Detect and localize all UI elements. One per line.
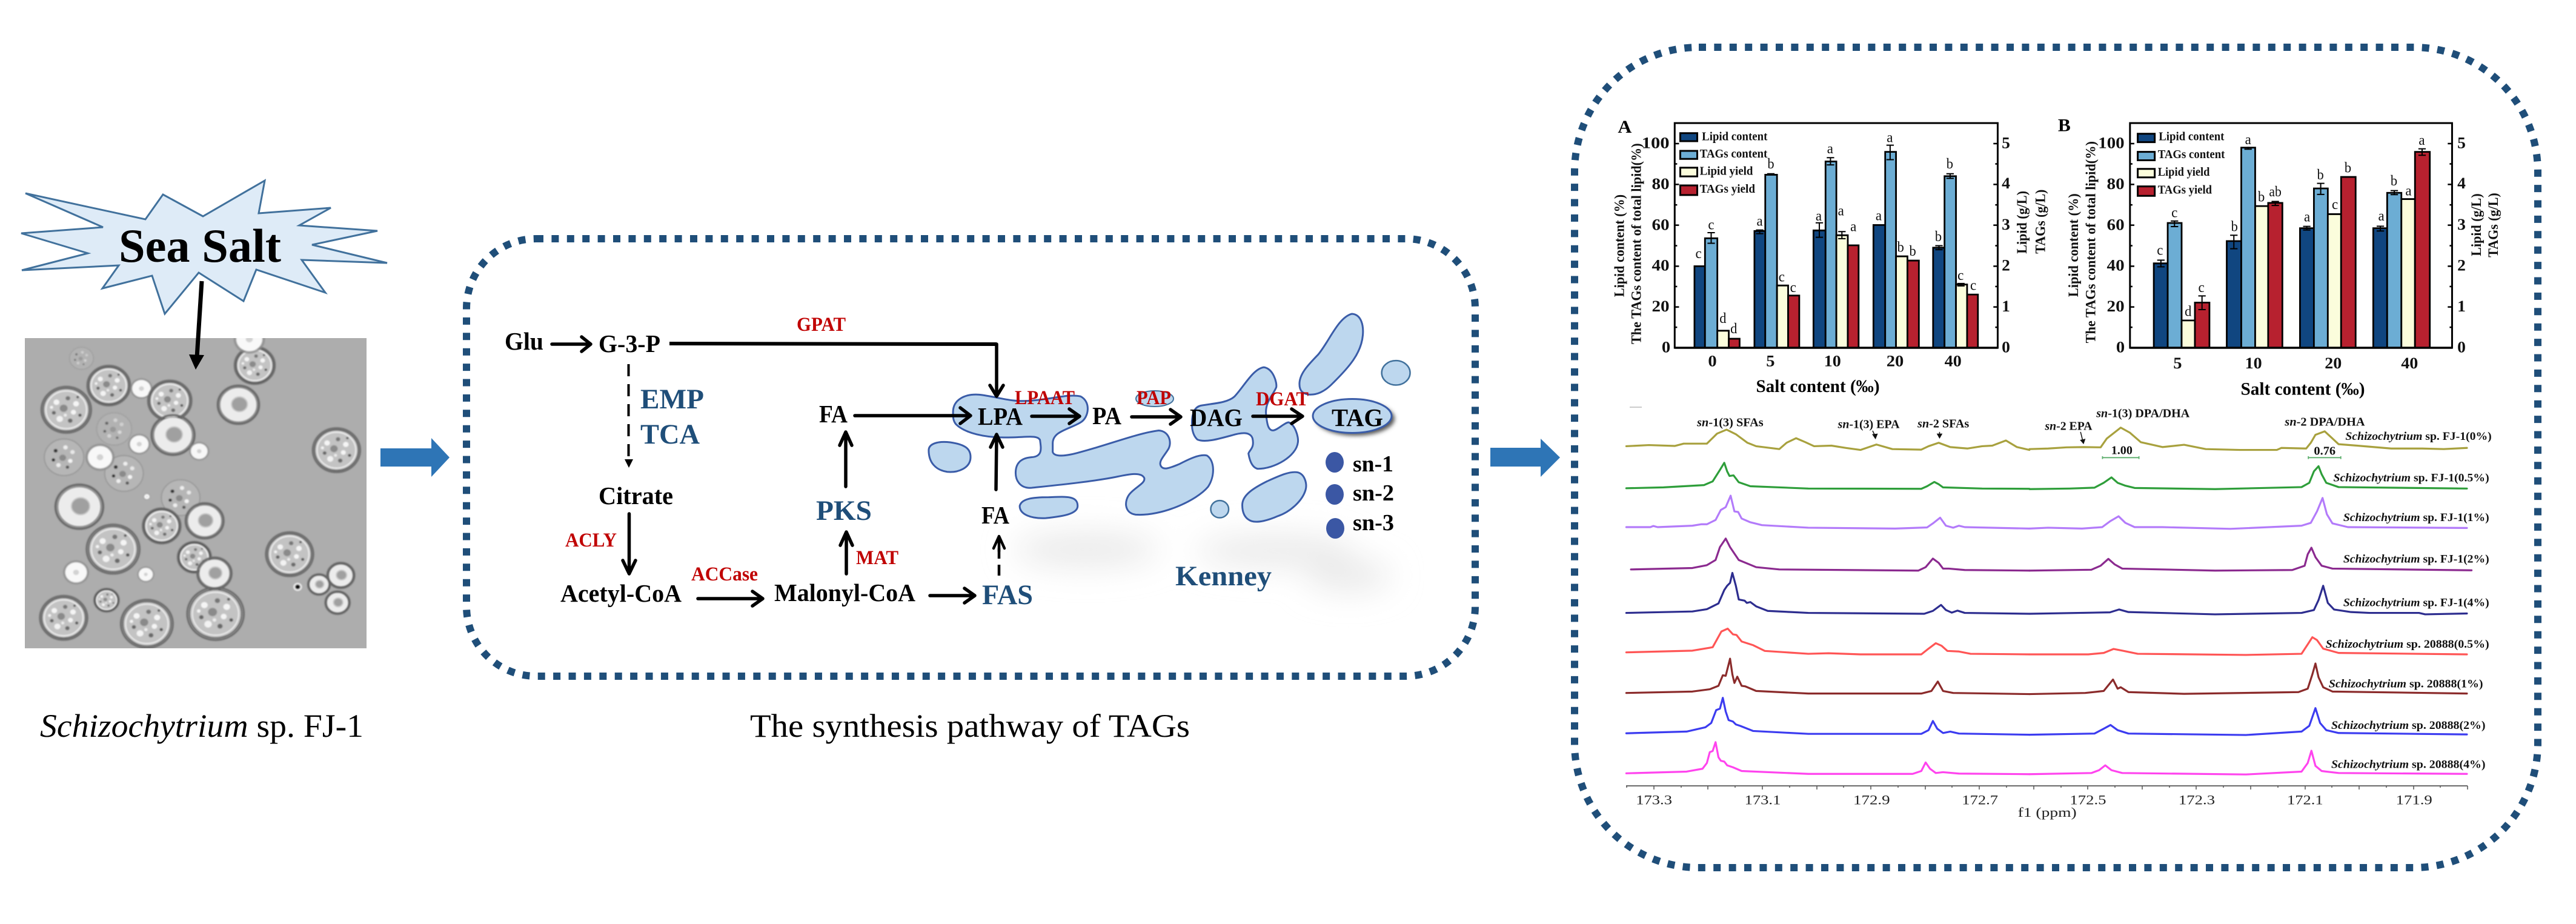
metabolite labels: Malonyl-CoA	[774, 579, 915, 607]
bar chart B: 0	[2116, 338, 2125, 356]
bar chart A: Salt content (‰)	[1756, 376, 1880, 396]
bar chart B: a	[2405, 182, 2412, 199]
bar chart A: d	[1730, 320, 1737, 336]
bar chart B: b	[2345, 159, 2351, 176]
bar chart A: TAGs content	[1700, 147, 1768, 161]
bar chart A: TAGs (g/L)	[2034, 190, 2048, 254]
bar chart B: Lipid yield	[2158, 165, 2210, 179]
bar chart A: b	[1910, 243, 1916, 259]
bar chart A: 100	[1642, 135, 1670, 152]
bar chart A: c	[1957, 267, 1964, 283]
bar chart B: 4	[2457, 174, 2466, 192]
sample labels: Schizochytrium sp. FJ-1(0%)	[2345, 430, 2492, 443]
bar chart A: 0	[1708, 352, 1717, 370]
bar chart A: c	[1790, 279, 1796, 295]
bar chart B: Lipid content	[2159, 130, 2225, 143]
bar chart A: b	[1897, 239, 1904, 255]
bar chart A: TAGs yield	[1700, 182, 1755, 196]
f1 ppm axis: f1 (ppm)	[2018, 805, 2077, 820]
f1 ppm axis: 171.9	[2396, 793, 2432, 808]
bar chart B: 20	[2107, 297, 2125, 315]
metabolite labels: PA	[1092, 402, 1121, 430]
bar chart B: 40	[2107, 256, 2125, 274]
bar chart A: 10	[1824, 352, 1841, 370]
f1 ppm axis: 172.7	[1962, 793, 1998, 808]
bar chart B: a	[2378, 207, 2385, 224]
peak labels: sn-2 EPA	[2045, 419, 2093, 433]
bar chart A: 2	[2002, 256, 2010, 274]
endoplasmic reticulum blobs	[929, 314, 1410, 522]
sample labels: Schizochytrium sp. FJ-1(4%)	[2343, 596, 2489, 610]
f1 ppm axis: 172.3	[2179, 793, 2215, 808]
peak labels: 1.00	[2111, 443, 2133, 457]
metabolite labels	[505, 327, 1243, 607]
f1 ppm axis: 172.9	[1853, 793, 1890, 808]
bar chart A: c	[1970, 277, 1976, 293]
bar chart B: c	[2332, 196, 2338, 212]
bar chart B: ab	[2269, 184, 2282, 200]
enzyme labels	[565, 314, 1309, 585]
peak labels: sn-2 DPA/DHA	[2284, 414, 2365, 428]
bar chart A: 0	[2002, 338, 2010, 356]
metabolite labels: Acetyl-CoA	[560, 579, 682, 607]
peak labels: sn-1(3) EPA	[1837, 418, 1900, 431]
peak labels: sn-2 SFAs	[1917, 417, 1969, 430]
bar chart B: 3	[2457, 216, 2466, 233]
bar chart B: b	[2231, 218, 2238, 234]
f1 ppm axis: 173.3	[1636, 793, 1672, 808]
bar chart B: a	[2245, 131, 2251, 147]
enzyme labels: GPAT	[797, 314, 846, 336]
dashed rounded frame	[466, 239, 1475, 676]
bar chart B: 60	[2107, 216, 2125, 234]
bar chart B: c	[2171, 204, 2177, 221]
bar chart B: 10	[2245, 354, 2262, 372]
bar chart B: b	[2317, 166, 2324, 182]
metabolite labels: FA	[819, 400, 848, 428]
metabolite labels: DAG	[1190, 404, 1243, 431]
bar chart A: c	[1695, 245, 1702, 261]
peak arrows and integrals	[1872, 431, 2341, 459]
enzyme labels: ACCase	[691, 563, 758, 585]
metabolite labels: G-3-P	[599, 330, 660, 357]
sample labels: Schizochytrium sp. 20888(2%)	[2331, 719, 2486, 732]
microscope photo of Schizochytrium cells	[25, 325, 367, 648]
bar chart A: The TAGs content of total lipid(%)	[1630, 143, 1645, 344]
f1 ppm axis: 173.1	[1745, 793, 1781, 808]
legend: sn positions	[1326, 451, 1394, 539]
sample labels: Schizochytrium sp. 20888(0.5%)	[2326, 638, 2489, 651]
bar chart A: Lipid content (%)	[1613, 194, 1628, 297]
f1 ppm axis: 172.5	[2070, 793, 2106, 808]
legend: sn positions: sn-1	[1353, 451, 1393, 477]
peak labels	[1696, 406, 2365, 457]
bar chart A: b	[1947, 155, 1953, 171]
sample labels: Schizochytrium sp. FJ-1(2%)	[2343, 553, 2489, 565]
metabolite labels: FA	[981, 501, 1009, 529]
bar chart B: B	[2058, 115, 2071, 135]
soft shadow under organelle	[1014, 534, 1391, 590]
f1 ppm axis: 172.1	[2287, 793, 2323, 808]
bar chart B: 40	[2401, 354, 2418, 372]
pathway names	[640, 384, 1272, 611]
bar chart A: 5	[2002, 135, 2010, 152]
bar chart B	[2058, 115, 2501, 399]
bar chart B: 5	[2457, 135, 2466, 152]
bar chart A: 3	[2002, 216, 2010, 233]
sample labels	[2326, 430, 2492, 771]
bar chart A: A	[1618, 117, 1632, 137]
legend: sn positions: sn-3	[1353, 510, 1394, 536]
pathway names: TCA	[640, 419, 700, 450]
NMR spectra stack	[1626, 406, 2492, 820]
bar chart B: Lipid content (%)	[2066, 193, 2082, 297]
bar chart B: 5	[2173, 354, 2182, 372]
bar chart A: Lipid (g/L)	[2015, 191, 2030, 254]
bar chart B: a	[2304, 208, 2310, 225]
arrow: pathway to results	[1490, 439, 1560, 477]
bar chart A: a	[1850, 218, 1856, 234]
bar chart B: d	[2185, 303, 2191, 319]
bar chart A: 60	[1652, 216, 1670, 234]
bar chart B: TAGs yield	[2158, 183, 2212, 196]
panel: synthesis pathway of TAGs	[466, 239, 1475, 744]
bar chart A: 40	[1945, 352, 1962, 370]
dashed rounded frame	[1575, 47, 2538, 868]
bar chart A: Lipid content	[1702, 130, 1768, 143]
panel: sea salt and microalgae	[21, 181, 387, 744]
pathway arrows	[552, 337, 1303, 606]
bar chart A	[1613, 117, 2048, 396]
bar chart B: 1	[2457, 297, 2466, 315]
bar chart A: 1	[2002, 297, 2010, 315]
bar chart A: d	[1719, 310, 1727, 327]
bar chart A: a	[1838, 202, 1844, 219]
bar chart B: c	[2199, 279, 2205, 295]
bar chart B: b	[2258, 188, 2265, 205]
sample labels: Schizochytrium sp. 20888(4%)	[2331, 758, 2486, 771]
bar chart A: 5	[1766, 352, 1775, 370]
bar chart A: 20	[1887, 352, 1904, 370]
bar chart A: 4	[2002, 174, 2010, 192]
TAG droplet: TAG	[1332, 404, 1383, 431]
peak labels: sn-1(3) DPA/DHA	[2096, 406, 2190, 420]
pathway names: EMP	[640, 384, 704, 415]
sample labels: Schizochytrium sp. FJ-1(0.5%)	[2334, 471, 2489, 484]
sample labels: Schizochytrium sp. 20888(1%)	[2329, 677, 2483, 691]
pathway names: PKS	[816, 495, 872, 527]
peak labels: 0.76	[2314, 444, 2335, 457]
bar chart B: b	[2391, 172, 2397, 188]
bar chart A: Lipid yield	[1700, 164, 1753, 178]
bar chart A: a	[1756, 213, 1763, 229]
bar chart A: 80	[1652, 175, 1670, 193]
bar chart A: b	[1767, 155, 1774, 171]
caption: Schizochytrium sp. FJ-1: Schizochytrium sp. FJ-1	[40, 708, 363, 744]
TAG droplet	[1313, 399, 1395, 436]
sample labels: Schizochytrium sp. FJ-1(1%)	[2343, 511, 2489, 524]
arrow: sea salt to cells	[189, 281, 204, 370]
bar chart A: b	[1935, 228, 1942, 245]
f1 ppm axis	[1626, 786, 2468, 820]
metabolite labels: Glu	[505, 327, 543, 355]
starburst callout: sea salt	[21, 181, 387, 314]
bar chart B: 2	[2457, 256, 2466, 274]
bar chart B: c	[2157, 242, 2163, 258]
bar chart B: 80	[2107, 175, 2125, 193]
bar chart A: a	[1827, 140, 1833, 156]
arrow: cells to pathway	[380, 438, 450, 477]
bar chart B: TAGs (g/L)	[2486, 193, 2501, 258]
enzyme labels: ACLY	[565, 530, 617, 551]
enzyme labels: MAT	[856, 547, 898, 569]
bar chart A: 20	[1652, 297, 1670, 315]
bar chart B: 20	[2325, 354, 2342, 372]
bar chart B: Salt content (‰)	[2240, 379, 2365, 399]
enzyme labels: LPAAT	[1015, 387, 1075, 409]
bar chart B: Lipid (g/L)	[2469, 193, 2485, 256]
pathway names: Kenney	[1175, 560, 1272, 592]
bar chart B: 100	[2098, 135, 2125, 152]
bar chart A: a	[1876, 207, 1882, 224]
spectrum traces	[1626, 428, 2472, 774]
bar chart A: 40	[1652, 256, 1670, 274]
bar chart B: a	[2418, 131, 2425, 148]
pathway names: FAS	[982, 579, 1033, 611]
starburst callout: sea salt: Sea Salt	[119, 219, 281, 272]
bar chart B: TAGs content	[2158, 147, 2225, 161]
enzyme labels: PAP	[1137, 387, 1171, 409]
panel: results	[1575, 47, 2538, 868]
bar chart A: c	[1779, 268, 1785, 285]
metabolite labels: LPA	[978, 402, 1023, 430]
caption: synthesis pathway: The synthesis pathway of TAGs	[750, 708, 1190, 744]
enzyme labels: DGAT	[1256, 388, 1309, 410]
metabolite labels: Citrate	[599, 482, 673, 510]
peak labels: sn-1(3) SFAs	[1696, 416, 1764, 429]
bar chart B: 0	[2457, 338, 2466, 356]
bar chart A: a	[1816, 207, 1822, 224]
bar chart B: The TAGs content of total lipid(%)	[2084, 141, 2099, 343]
legend: sn positions: sn-2	[1353, 480, 1394, 506]
bar chart A: 0	[1662, 338, 1670, 356]
bar chart A: a	[1887, 129, 1893, 145]
bar chart A: c	[1708, 216, 1715, 233]
